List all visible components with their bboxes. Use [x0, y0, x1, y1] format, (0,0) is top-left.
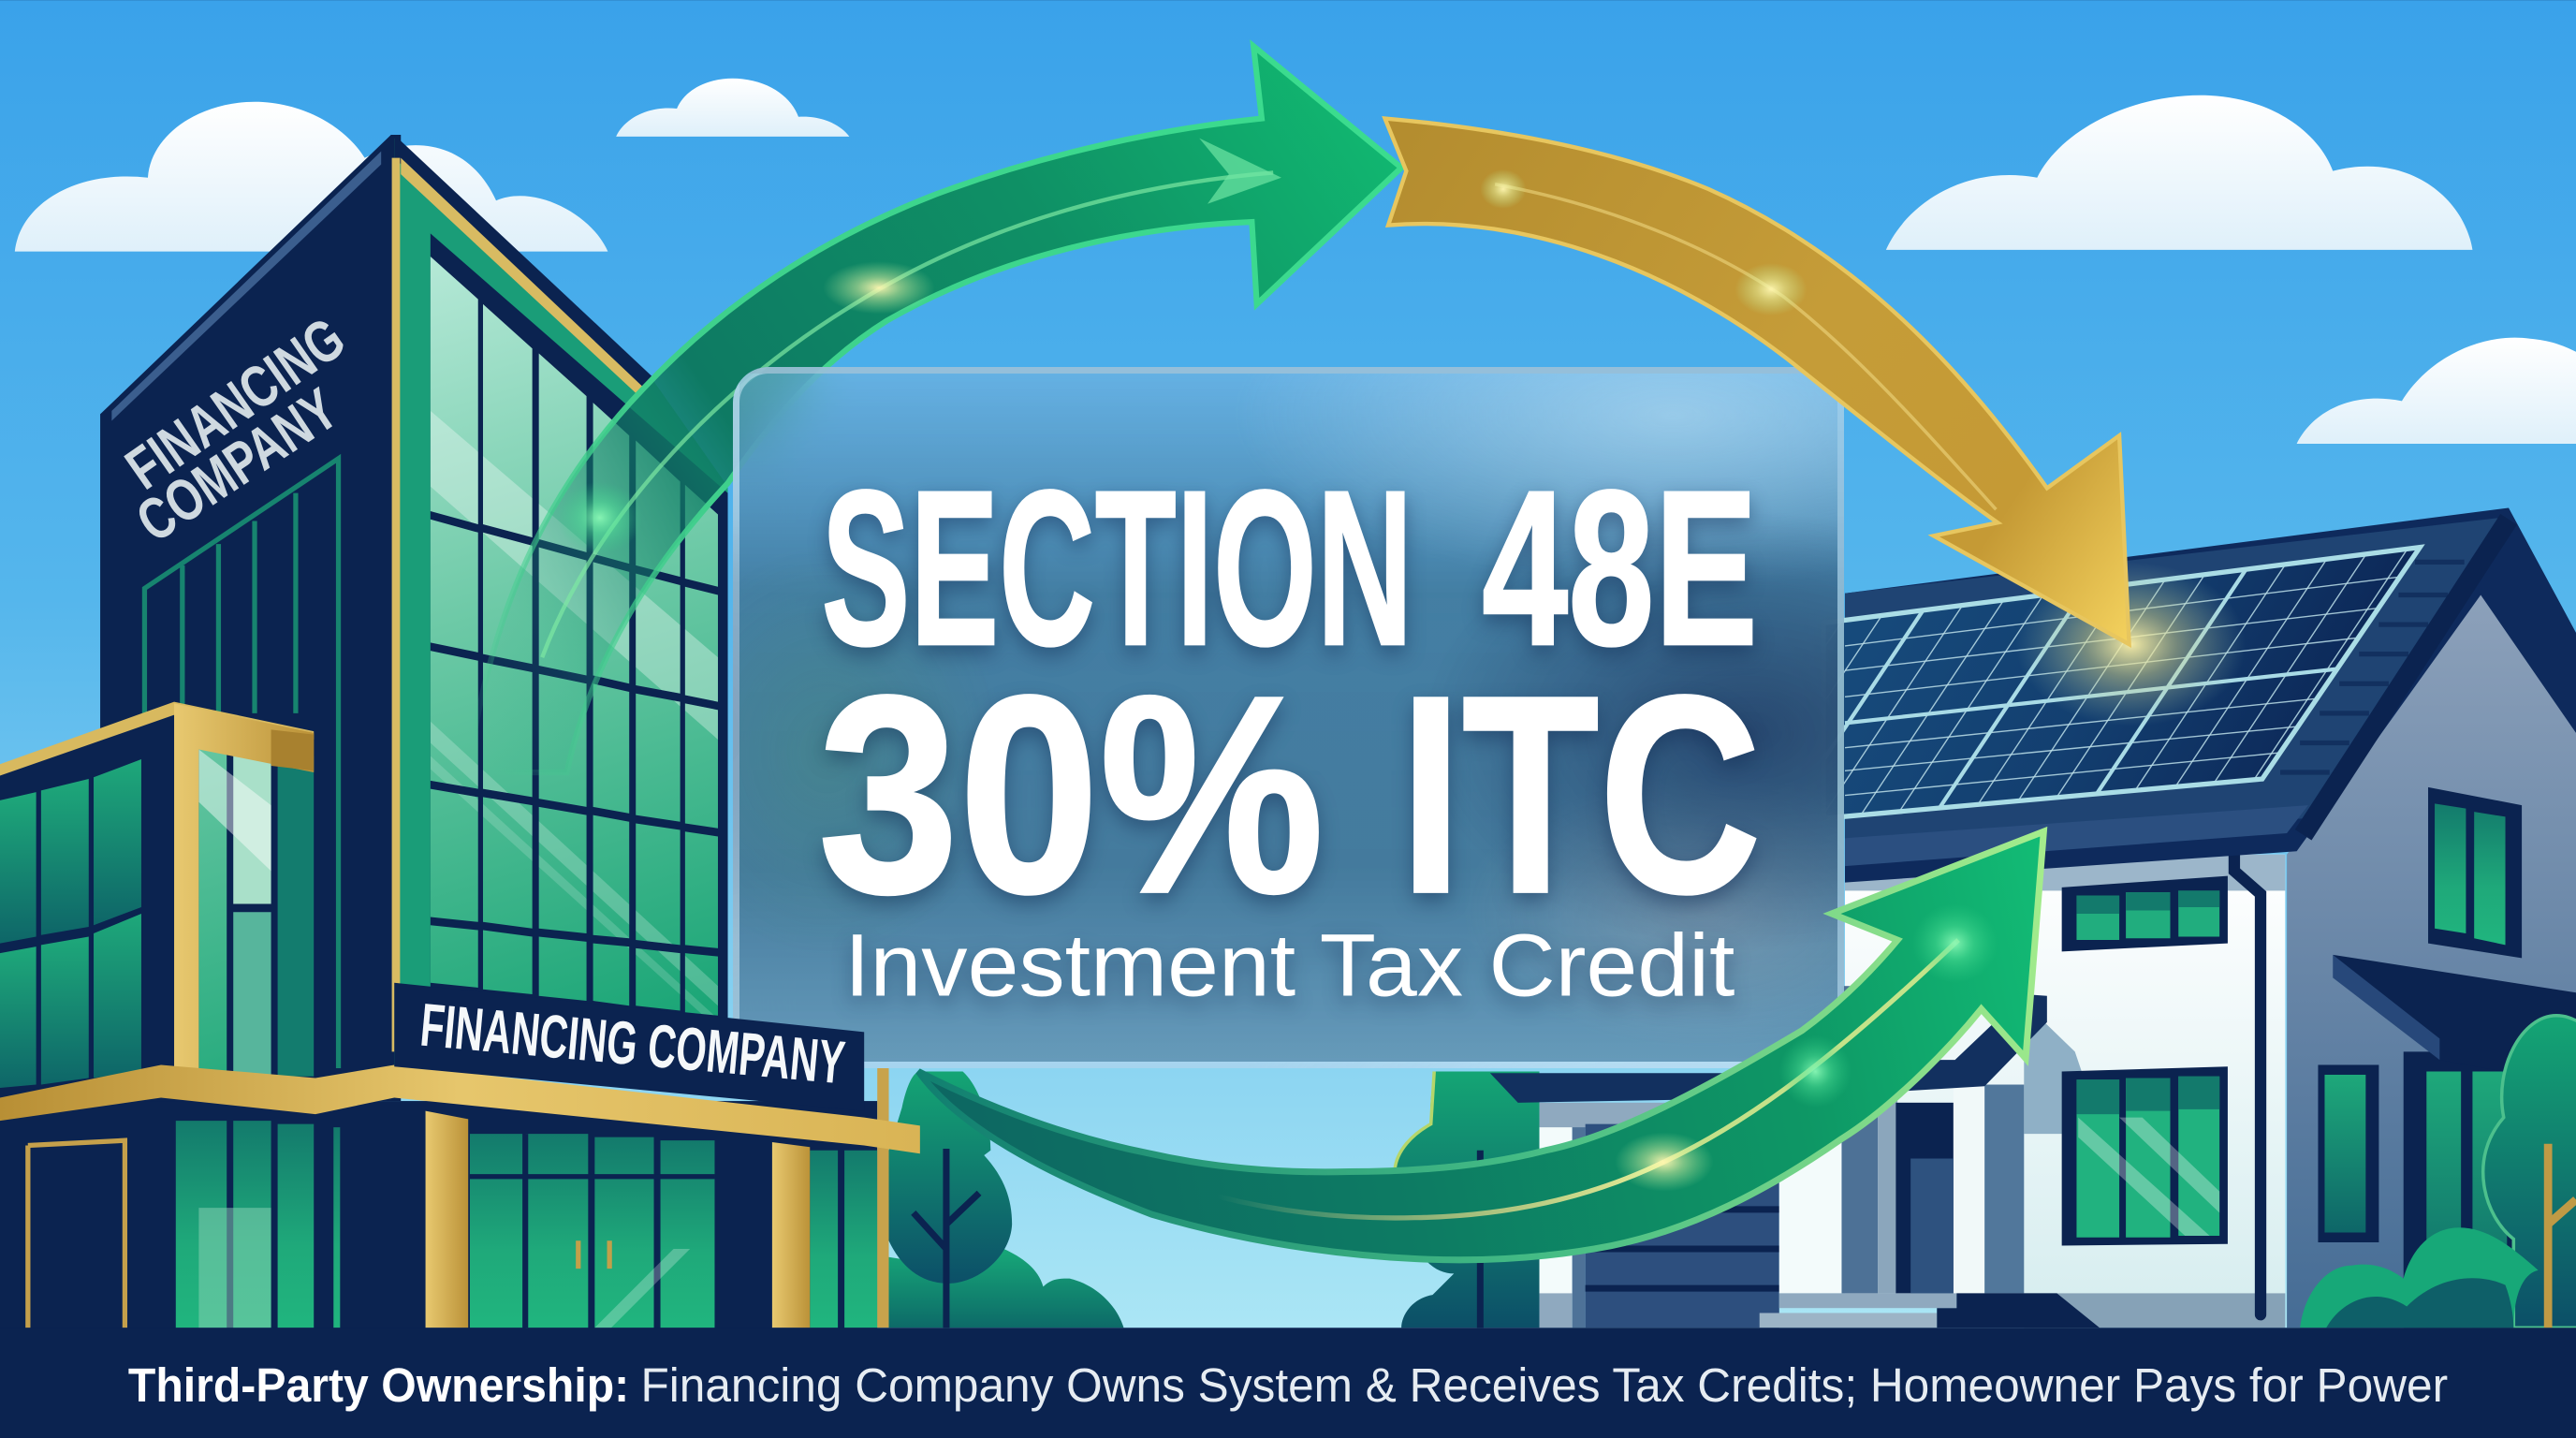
roof — [1844, 507, 2576, 883]
downpipe — [2234, 855, 2261, 1314]
window: gable upper — [2428, 787, 2522, 958]
left wing walls — [1540, 1103, 1677, 1129]
ground floor windows — [176, 1121, 877, 1328]
heading: section 48E: 48E — [1482, 445, 1758, 692]
arrow highlight — [1495, 184, 1996, 509]
tree trunk — [914, 1149, 979, 1328]
tree right — [2483, 1016, 2576, 1328]
glass face frame — [394, 139, 728, 1068]
wall: gable — [2287, 575, 2576, 1328]
heading: section 48E: SECTION — [822, 445, 1412, 692]
porch roof — [1490, 994, 2047, 1103]
building: financing company — [0, 135, 920, 1331]
caption bar text — [128, 1358, 2448, 1412]
low wing — [0, 707, 315, 1118]
cloud: top left — [15, 102, 607, 252]
subheading: Investment Tax Credit — [844, 917, 1734, 1016]
entrance sign: FINANCING COMPANY — [417, 990, 848, 1097]
gold canopy band — [0, 1064, 920, 1153]
glass panes — [431, 257, 718, 1016]
gold columns — [426, 1111, 468, 1328]
porch — [1490, 986, 2100, 1328]
arrow: green upper (financing to top) — [468, 46, 1401, 772]
bush — [889, 1249, 1123, 1328]
heading: 30% ITC: ITC — [1399, 637, 1761, 951]
window: lower large — [2062, 1066, 2228, 1246]
arrow: green lower (homeowner flow) — [918, 831, 2043, 1260]
clouds — [15, 79, 2576, 444]
low wing windows — [0, 759, 141, 1088]
tower dark face — [100, 135, 401, 1101]
entrance sign — [394, 983, 864, 1111]
solar panels — [1844, 544, 2425, 819]
window: upper small — [2062, 876, 2228, 951]
heading: 30% ITC: 30% — [818, 637, 1325, 951]
wall: front — [1845, 855, 2285, 1295]
tower sign: COMPANY — [125, 376, 349, 555]
heading: 30% ITC — [818, 637, 1761, 951]
panel headline text — [818, 445, 1761, 1016]
ground floor — [0, 1101, 877, 1331]
glass reflections — [431, 411, 718, 1029]
arrow highlight — [1218, 1162, 1664, 1218]
awning and side entry — [2333, 955, 2576, 1328]
roof shingle strip — [2280, 562, 2465, 772]
door handles — [578, 1240, 609, 1269]
cloud: top right — [1886, 95, 2472, 250]
gold door frame — [28, 1140, 124, 1328]
arrow: gold (to solar roof) — [1385, 119, 2130, 644]
tree behind house — [1395, 1071, 1540, 1328]
tower vertical green strips — [144, 459, 339, 1068]
window: lower narrow — [2318, 1064, 2378, 1242]
cloud: far right — [2297, 338, 2576, 444]
central glass panel — [733, 367, 1844, 1068]
caption body: Financing Company Owns System & Receives Tax Credits; Homeowner Pays for Power — [640, 1358, 2448, 1412]
house — [1395, 493, 2576, 1328]
caption bold lead: Third-Party Ownership: — [128, 1358, 629, 1412]
atrium windows — [198, 749, 227, 1077]
roof fascia — [2304, 520, 2509, 835]
bush right — [2300, 1227, 2539, 1328]
cloud: small centre — [616, 79, 849, 137]
tree crown — [889, 1071, 1012, 1284]
trees left — [889, 1071, 1123, 1328]
caption bar — [0, 1328, 2576, 1438]
steps — [1779, 1293, 1956, 1308]
garage door — [1586, 1124, 1779, 1328]
tower sign: FINANCING — [114, 305, 357, 502]
atrium gold frame — [174, 703, 314, 1068]
arrow highlight — [542, 172, 1273, 657]
